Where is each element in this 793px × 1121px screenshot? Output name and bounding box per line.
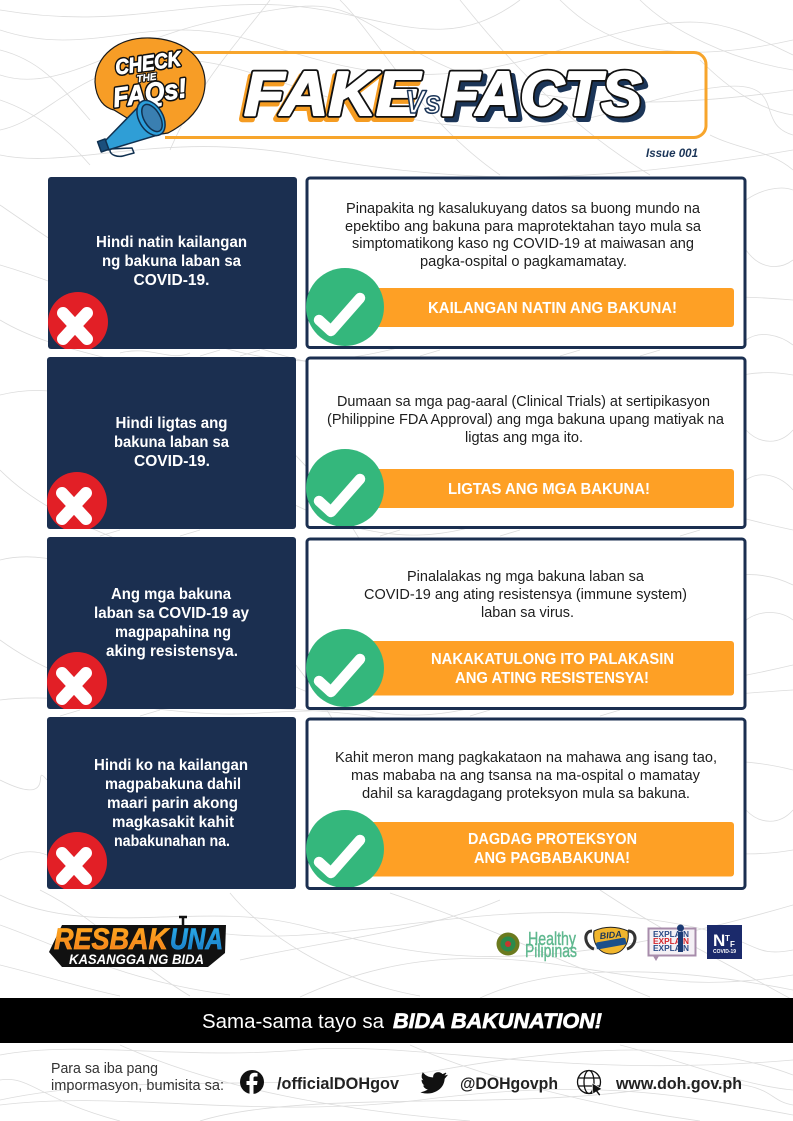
callout bar bbox=[370, 469, 734, 508]
icon: green check bbox=[306, 449, 384, 527]
panel: fact 3: NAKAKATULONG ITO PALAKASIN bbox=[431, 651, 674, 668]
slogan: Sama-sama tayo sa bbox=[202, 1011, 385, 1033]
icon: green check bbox=[306, 629, 384, 707]
callout bar bbox=[370, 822, 734, 876]
title: FAKE vs FACTS: FAKE bbox=[241, 64, 419, 133]
panel: fact 4: mas mababa na ang tsansa na ma-ospital o mamatay bbox=[351, 768, 701, 784]
contact note: Para sa iba pang bbox=[51, 1060, 158, 1077]
panel: fact 4: Kahit meron mang pagkakataon na mahawa ang isang tao, bbox=[335, 750, 717, 766]
logo: Resbakuna bbox=[49, 917, 226, 967]
panel: fact 2: Dumaan sa mga pag-aaral (Clinical Trials) at sertipikasyon bbox=[337, 394, 710, 410]
logo: Healthy Pilipinas: Pilipinas bbox=[525, 941, 577, 961]
panel: myth 3: magpapahina ng bbox=[115, 624, 231, 641]
panel: myth 2: Hindi ligtas ang bbox=[116, 415, 228, 432]
row 4 bbox=[47, 717, 745, 892]
panel: fact 3: Pinalalakas ng mga bakuna laban sa bbox=[407, 569, 645, 585]
panel: myth 4 bbox=[47, 717, 296, 892]
panel: myth 4: Hindi ko na kailangan bbox=[94, 757, 248, 774]
panel: fact 4: dahil sa karagdagang proteksyon mula sa bakuna. bbox=[362, 786, 690, 802]
badge: Check the FAQs speech bubble: THE bbox=[136, 72, 158, 85]
panel: fact 1: pagka-ospital o pagkamamatay. bbox=[420, 254, 627, 270]
orange banner frame bbox=[165, 52, 706, 138]
panel: fact 4 bbox=[306, 719, 745, 888]
badge: Check the FAQs speech bubble: FAQs! bbox=[111, 73, 188, 113]
logo: Explain Explain Explain: EXPLAIN bbox=[653, 937, 689, 946]
icon: red cross bbox=[48, 292, 108, 352]
panel: fact 3 bbox=[306, 539, 745, 708]
logo: Healthy Pilipinas: Healthy bbox=[528, 929, 576, 949]
icon: red cross bbox=[47, 652, 107, 712]
logo: NTF COVID-19: N bbox=[713, 931, 725, 950]
logo: Resbakuna: UNA bbox=[170, 923, 223, 956]
website: www.doh.gov.ph bbox=[615, 1074, 742, 1093]
title: FAKE vs FACTS: FACTS bbox=[442, 60, 642, 129]
logo: Resbakuna: KASANGGA NG BIDA bbox=[69, 951, 204, 967]
logo: Explain Explain Explain: EXPLAIN bbox=[653, 944, 689, 953]
panel: myth 3 bbox=[47, 537, 296, 712]
panel: fact 1: simptomatikong kaso ng COVID-19 at maiwasan ang bbox=[352, 236, 694, 252]
icon: facebook bbox=[240, 1070, 264, 1094]
badge: Check the FAQs speech bubble: CHECK bbox=[114, 47, 184, 80]
panel: fact 1 bbox=[306, 178, 745, 348]
panel: myth 1: ng bakuna laban sa bbox=[102, 253, 241, 270]
panel: myth 1 bbox=[48, 177, 297, 352]
footer band: BIDA BAKUNATION! bbox=[393, 1010, 602, 1033]
icon: twitter bbox=[422, 1073, 447, 1093]
panel: fact 1: Pinapakita ng kasalukuyang datos sa buong mundo na bbox=[346, 201, 701, 217]
panel: myth 4: maari parin akong bbox=[107, 795, 238, 812]
panel: myth 4: nabakunahan na. bbox=[114, 833, 230, 850]
panel: myth 3: aking resistensya. bbox=[106, 643, 238, 660]
panel: fact 3: ANG ATING RESISTENSYA! bbox=[455, 670, 649, 687]
badge: Check the FAQs speech bubble: THE bbox=[136, 72, 158, 85]
contact note bbox=[51, 1060, 224, 1094]
row 1 bbox=[48, 177, 745, 352]
logo: Resbakuna: RESBAK bbox=[54, 923, 170, 956]
logo: NTF COVID-19: T bbox=[725, 934, 730, 943]
logo: Explain Explain Explain: EXPLAIN bbox=[653, 930, 689, 939]
panel: fact 2: (Philippine FDA Approval) ang mga bakuna upang matiyak na bbox=[327, 412, 725, 428]
panel: myth 2: COVID-19. bbox=[134, 453, 210, 470]
title: FAKE vs FACTS: Vs bbox=[405, 84, 441, 120]
panel: myth 3: laban sa COVID-19 ay bbox=[94, 605, 249, 622]
panel: myth 4: magkasakit kahit bbox=[112, 814, 234, 831]
panel: fact 2: LIGTAS ANG MGA BAKUNA! bbox=[448, 481, 650, 498]
icon: globe with cursor bbox=[578, 1070, 602, 1096]
icon: blue megaphone bbox=[98, 96, 171, 156]
facebook handle: /officialDOHgov bbox=[277, 1074, 400, 1093]
panel: myth 3: Ang mga bakuna bbox=[111, 586, 231, 603]
title: FAKE vs FACTS: FAKE bbox=[244, 60, 422, 129]
logo: NTF COVID-19: F bbox=[730, 940, 735, 949]
logo: NTF COVID-19 bbox=[707, 925, 742, 959]
row 3 bbox=[47, 537, 745, 712]
icon: red cross bbox=[47, 832, 107, 892]
panel: fact 1: KAILANGAN NATIN ANG BAKUNA! bbox=[428, 300, 677, 317]
logo: Bida Solusyon mask: BIDA bbox=[599, 929, 622, 941]
panel: fact 2: ligtas ang mga ito. bbox=[465, 430, 583, 446]
contact note: impormasyon, bumisita sa: bbox=[51, 1077, 224, 1094]
twitter handle: @DOHgovph bbox=[460, 1074, 558, 1093]
header: title banner bbox=[165, 52, 706, 160]
callout bar bbox=[370, 288, 734, 327]
issue label: Issue 001 bbox=[646, 148, 698, 160]
logo: DOH seal bbox=[496, 932, 520, 956]
icon: green check bbox=[306, 268, 384, 346]
panel: myth 1: Hindi natin kailangan bbox=[96, 234, 247, 251]
title: FAKE vs FACTS bbox=[241, 60, 646, 133]
panel: fact 3: laban sa virus. bbox=[481, 605, 574, 621]
title: FAKE vs FACTS: FACTS bbox=[446, 64, 646, 133]
icon: green check bbox=[306, 810, 384, 888]
panel: fact 2 bbox=[306, 358, 745, 528]
badge: Check the FAQs speech bubble bbox=[95, 38, 205, 135]
badge: Check the FAQs speech bubble: FAQs! bbox=[111, 73, 188, 113]
panel: fact 4: DAGDAG PROTEKSYON bbox=[468, 831, 637, 848]
callout bar bbox=[370, 641, 734, 696]
logo: Explain Explain Explain bbox=[648, 924, 696, 961]
footer band bbox=[0, 998, 793, 1043]
panel: myth 4: magpabakuna dahil bbox=[105, 776, 241, 793]
panel: myth 2 bbox=[47, 357, 296, 532]
panel: myth 2: bakuna laban sa bbox=[114, 434, 229, 451]
panel: fact 4: ANG PAGBABAKUNA! bbox=[474, 850, 630, 867]
badge: Check the FAQs speech bubble: CHECK bbox=[114, 47, 184, 80]
panel: fact 1: epektibo ang bakuna para maprotektahan tayo mula sa bbox=[345, 219, 702, 235]
title: FAKE vs FACTS: FAKE bbox=[244, 60, 422, 129]
panel: myth 1: COVID-19. bbox=[134, 272, 210, 289]
logo: Bida Solusyon mask bbox=[586, 927, 635, 954]
row 2 bbox=[47, 357, 745, 532]
panel: fact 3: COVID-19 ang ating resistensya (immune system) bbox=[364, 587, 687, 603]
logo: NTF COVID-19: COVID-19 bbox=[713, 949, 736, 955]
title: FAKE vs FACTS: FACTS bbox=[442, 60, 642, 129]
icon: red cross bbox=[47, 472, 107, 532]
logo: Healthy Pilipinas bbox=[525, 929, 577, 961]
